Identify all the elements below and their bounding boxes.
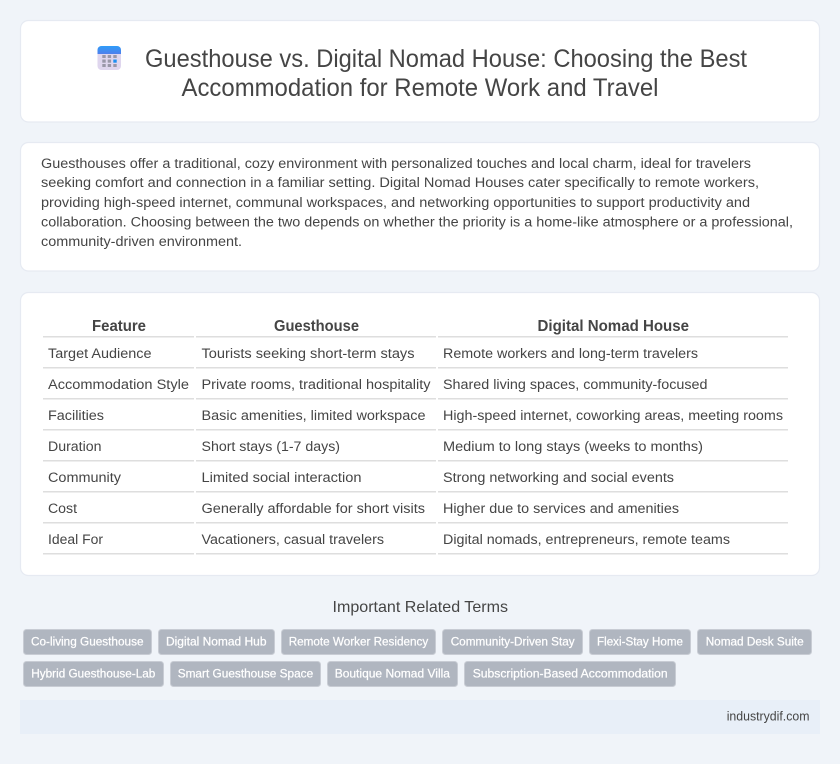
tag: Smart Guesthouse Space — [170, 662, 320, 686]
table row: Facilities: High-speed internet, coworking areas, meeting rooms — [443, 408, 783, 424]
table row: Facilities: Basic amenities, limited workspace — [202, 408, 426, 424]
heading: related terms: Important Related Terms — [332, 599, 508, 616]
tag: Co-living Guesthouse — [24, 630, 152, 654]
table row: Target Audience: Remote workers and long-term travelers — [443, 346, 698, 362]
text block: intro: providing high-speed internet, communal workspaces, and networking opportunities to support productivity and — [41, 195, 750, 211]
icon: calendar — [98, 46, 121, 70]
title — [145, 45, 747, 102]
tag: Community-Driven Stay — [442, 630, 582, 654]
tag: Remote Worker Residency: Remote Worker Residency — [289, 634, 429, 648]
table row: Facilities — [43, 408, 788, 430]
table row: Facilities: Facilities — [48, 408, 104, 424]
table row: Duration: Medium to long stays (weeks to months) — [443, 439, 703, 455]
tag: Nomad Desk Suite — [698, 630, 812, 654]
table row: Accommodation Style — [43, 377, 788, 400]
tags: related terms — [24, 630, 812, 686]
table row: Target Audience: Target Audience — [48, 346, 152, 362]
table row: Community: Strong networking and social events — [443, 470, 674, 486]
tag: Co-living Guesthouse: Co-living Guesthouse — [31, 634, 144, 648]
table header row: Digital Nomad House — [538, 318, 689, 335]
table row: Ideal For — [43, 532, 788, 554]
table row: Accommodation Style: Accommodation Style — [48, 377, 189, 393]
table row: Ideal For: Digital nomads, entrepreneurs, remote teams — [443, 532, 730, 548]
panel: header — [20, 20, 820, 122]
table row: Duration — [43, 439, 788, 462]
table row: Ideal For: Vacationers, casual travelers — [202, 532, 384, 548]
table row: Cost: Generally affordable for short visits — [202, 501, 425, 517]
table header row — [43, 318, 788, 338]
tag: Subscription-Based Accommodation — [464, 662, 676, 686]
table row: Duration: Duration — [48, 439, 102, 455]
table row: Target Audience — [43, 346, 788, 368]
table row: Community: Limited social interaction — [202, 470, 362, 486]
tag: Boutique Nomad Villa — [328, 662, 458, 686]
footer source text: industrydif.com — [727, 710, 810, 724]
text block: intro: Guesthouses offer a traditional, cozy environment with personalized touches and local charm, ideal for travelers — [41, 156, 751, 172]
tag: Boutique Nomad Villa: Boutique Nomad Villa — [335, 666, 450, 680]
panel: intro paragraph — [20, 142, 820, 271]
tag: Hybrid Guesthouse-Lab — [24, 662, 164, 686]
text block: intro: community-driven environment. — [41, 234, 242, 250]
tag: Digital Nomad Hub: Digital Nomad Hub — [166, 634, 267, 648]
table row: Cost: Higher due to services and amenities — [443, 501, 679, 517]
title: Accommodation for Remote Work and Travel — [182, 74, 658, 102]
table row: Duration: Short stays (1-7 days) — [202, 439, 340, 455]
table header row: Feature — [92, 318, 146, 335]
table row: Accommodation Style: Private rooms, traditional hospitality — [202, 377, 431, 393]
table header row: Guesthouse — [274, 318, 359, 335]
table row: Accommodation Style: Shared living spaces, community-focused — [443, 377, 708, 393]
tag: Subscription-Based Accommodation: Subscription-Based Accommodation — [473, 666, 668, 680]
tag: Flexi-Stay Home — [590, 630, 690, 654]
table row: Cost — [43, 501, 788, 524]
tag: Nomad Desk Suite: Nomad Desk Suite — [706, 634, 804, 648]
tag: Digital Nomad Hub — [158, 630, 274, 654]
panel: comparison table — [20, 292, 820, 576]
footer bar — [20, 700, 820, 734]
title: Guesthouse vs. Digital Nomad House: Choosing the Best — [145, 45, 747, 73]
text block: intro: collaboration. Choosing between the two depends on whether the priority is a home-like atmosphere or a professional, — [41, 214, 793, 230]
table row: Community — [43, 470, 788, 492]
tag: Smart Guesthouse Space: Smart Guesthouse Space — [178, 666, 313, 680]
tag: Remote Worker Residency — [282, 630, 436, 654]
text block: intro: seeking comfort and connection in a familiar setting. Digital Nomad Houses cater specifically to remote workers, — [41, 175, 759, 191]
tag: Hybrid Guesthouse-Lab: Hybrid Guesthouse-Lab — [31, 666, 155, 680]
tag: Community-Driven Stay: Community-Driven Stay — [451, 634, 575, 648]
table row: Cost: Cost — [48, 501, 77, 517]
table row: Target Audience: Tourists seeking short-term stays — [202, 346, 414, 362]
text block: intro — [41, 156, 793, 250]
table row: Ideal For: Ideal For — [48, 532, 103, 548]
tag: Flexi-Stay Home: Flexi-Stay Home — [597, 634, 683, 648]
table row: Community: Community — [48, 470, 122, 486]
